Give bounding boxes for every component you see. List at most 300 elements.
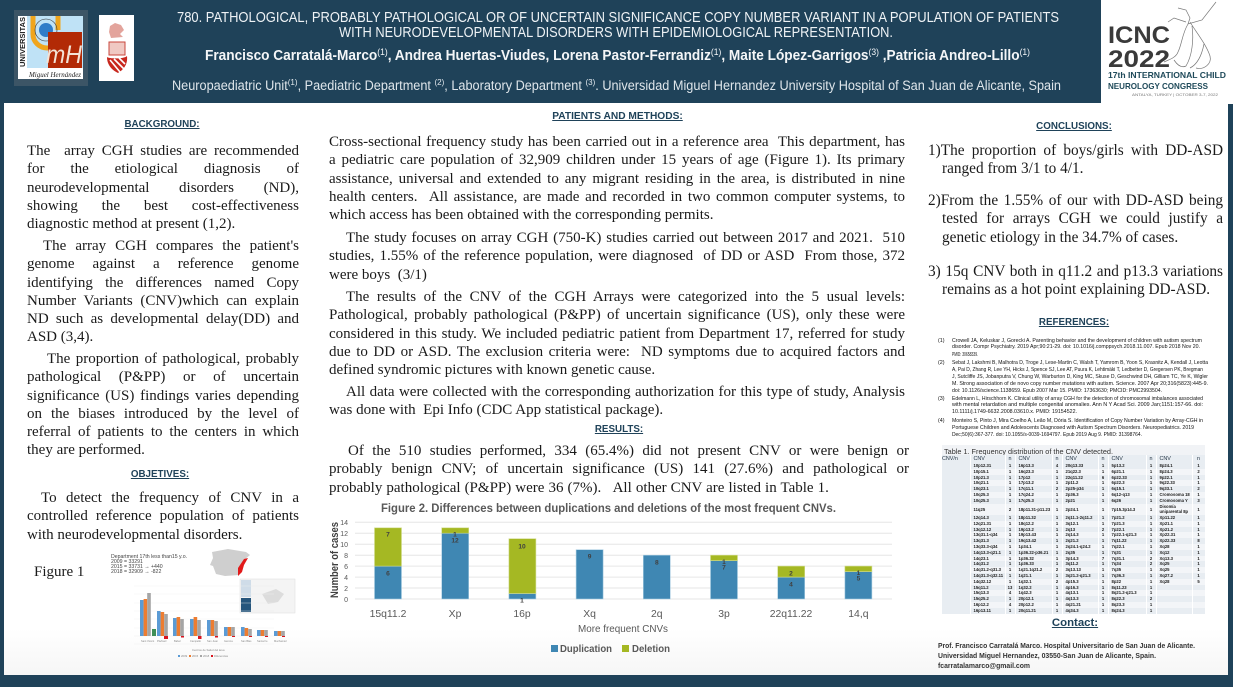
table 1: frequency distribution: 11q25 — [974, 507, 985, 512]
y axis labels: 0 — [344, 597, 348, 604]
affiliations: . Universidad Miguel Hernandez University Hospital of San Juan de Alicante, Spain — [595, 78, 1061, 93]
title line 2: WITH NEURODEVELOPMENTAL DISORDERS WITH EPIDEMIOLOGICAL REPRESENTATION. — [339, 25, 893, 41]
logo: Universitas Miguel Hernandez: UNIVERSITAS — [18, 17, 27, 67]
table 1: frequency distribution: 1 — [1197, 507, 1200, 512]
category labels — [370, 609, 869, 620]
table 1: frequency distribution: 1 — [1056, 498, 1058, 503]
table 1: frequency distribution: 1 — [1102, 602, 1104, 607]
table 1: frequency distribution: 20p12.2 — [1018, 602, 1034, 607]
table 1: frequency distribution: 1 — [1197, 492, 1200, 497]
table 1: frequency distribution: 2 — [1150, 556, 1152, 561]
table 1: frequency distribution: 2 — [1197, 486, 1200, 491]
table 1: frequency distribution: 1p34.1 — [1018, 544, 1032, 549]
table 1: frequency distribution: 1q32.2 — [1018, 585, 1032, 590]
table 1: frequency distribution: 1 — [1009, 480, 1011, 485]
text block: references: (2) — [938, 360, 945, 366]
table 1: frequency distribution: 1 — [1197, 561, 1200, 566]
table 1: frequency distribution: 1 — [1102, 480, 1104, 485]
text block: references: M. Strong association of de novo copy number mutations with autism. Science. 2007 Apr 20;316(5823):445-9. — [952, 381, 1208, 387]
table 1: frequency distribution: 4 — [1009, 602, 1011, 607]
text block: background paragraph 1: diagnostic method at present (1,2). — [27, 216, 235, 232]
table 1: frequency distribution: 1 — [1102, 596, 1104, 601]
text block: background paragraph 3: they are performed. — [27, 442, 145, 458]
table 1: frequency distribution: 10q25.3 — [974, 498, 989, 503]
chart: figure 1 population by health centre with maps: Diferencias — [214, 654, 229, 658]
table 1: frequency distribution: 2 — [1009, 507, 1011, 512]
category labels: 14,q — [848, 609, 869, 620]
category labels: 16p — [513, 609, 531, 620]
table 1: frequency distribution: 1 — [1150, 486, 1152, 491]
text block: references: doi: 10.1126/science.1138659. Epub 2007 Mar 15. PMID: 17363630; PMCID: PMC2993504. — [952, 388, 1162, 394]
logo: ICNC 2022: 17th INTERNATIONAL CHILD — [1108, 70, 1226, 80]
authors: (3) — [869, 47, 879, 57]
table 1: frequency distribution: 2 — [1102, 527, 1104, 532]
table 1: frequency distribution: 1 — [1009, 486, 1011, 491]
table 1: frequency distribution: 6 — [1102, 475, 1104, 480]
table 1: frequency distribution: 21q22.3 — [1066, 469, 1081, 474]
table 1: frequency distribution: 1 — [1102, 507, 1104, 512]
table 1: frequency distribution: 19q13.42 — [1018, 538, 1036, 543]
table 1: frequency distribution: 1 — [1009, 550, 1011, 555]
chart: figure 1 population by health centre with maps: San Juan — [207, 639, 219, 643]
table 1: frequency distribution: 14q31.2 — [974, 561, 989, 566]
authors: Francisco Carratalá-Marco — [205, 48, 387, 64]
table 1: frequency distribution: 10q23.1 — [974, 486, 989, 491]
table 1: frequency distribution: 7p21.2 — [1112, 515, 1125, 520]
table 1: frequency distribution: 1 — [1056, 469, 1058, 474]
legend — [551, 644, 670, 655]
authors: (1) — [1020, 47, 1030, 57]
table 1: frequency distribution: 1 — [1102, 579, 1104, 584]
text block: background paragraph 2: ASD (3,4). — [27, 329, 93, 345]
table 1: frequency distribution: 1 — [1009, 498, 1011, 503]
heading: contact: Contact: — [1052, 617, 1098, 629]
chart: figure 1 population by health centre with maps: 2015 — [192, 654, 199, 658]
text block: background paragraph 1: showing the best cost-effectiveness — [27, 198, 299, 214]
table 1: frequency distribution: 1 — [1150, 579, 1152, 584]
text block: conclusion 2: tested for arrays CGH we could justify a — [942, 210, 1223, 227]
table 1: frequency distribution: 1 — [1056, 527, 1058, 532]
text block: background paragraph 3: pathological (P&PP) or of uncertain — [27, 369, 299, 385]
text block: contact details: fcarratalamarco@gmail.com — [938, 661, 1030, 670]
table 1: frequency distribution: 18q12.2 — [1018, 521, 1034, 526]
table 1: frequency distribution: Cromosoma 18 — [1160, 492, 1190, 497]
category labels: 15q11.2 — [370, 609, 407, 620]
table 1: frequency distribution: 1 — [1056, 585, 1058, 590]
table 1: frequency distribution: 1 — [1150, 532, 1152, 537]
duplication bars — [374, 533, 872, 599]
table 1: frequency distribution: 1q21.1q21.2 — [1018, 567, 1042, 572]
text block: references: with mental retardation and multiple congenital anomalies. Ann N Y Acad Sci. 2009 Jan;1151:157-66. doi: — [951, 402, 1203, 408]
table 1: frequency distribution: 4p16.3 — [1066, 585, 1079, 590]
table 1: frequency distribution: 1 — [1056, 515, 1058, 520]
table 1: frequency distribution: 1 — [1150, 608, 1152, 613]
text block: references: disorder. Compr Psychiatry. 2019 Apr;90:21-29. doi: 10.1016/j.comppsych.2018.11.007. Epub 2018 Nov 20. — [952, 344, 1200, 350]
table 1: frequency distribution: 4q21.21 — [1066, 602, 1081, 607]
table 1: frequency distribution: Xq25 — [1160, 561, 1170, 566]
bar value labels: 9 — [588, 554, 592, 560]
text block: methods paragraph 2 — [329, 230, 905, 282]
table 1: frequency distribution: 7q22.1 — [1112, 544, 1125, 549]
table 1: frequency distribution: 15q13.3 — [974, 590, 989, 595]
table 1: frequency distribution: 1 — [1150, 515, 1152, 520]
table 1: frequency distribution: 1 — [1150, 544, 1152, 549]
text block: methods paragraph 2: The study focuses on array CGH (750-K) studies carried out between 2017 and 2021. 510 — [346, 230, 905, 246]
table 1: frequency distribution: 1 — [1102, 515, 1104, 520]
table 1: frequency distribution: 3q11.2 — [1066, 561, 1078, 566]
table 1: frequency distribution: 17q25.3 — [1018, 498, 1034, 503]
affiliations: , Laboratory Department — [444, 78, 585, 93]
table 1: frequency distribution: 1 — [1009, 573, 1011, 578]
chart: figure 1 population by health centre with maps — [111, 549, 296, 658]
text block: methods paragraph 1: Cross-sectional frequency study has been carried out in a reference area This department, has — [329, 134, 905, 150]
table 1: frequency distribution: n — [1150, 456, 1152, 462]
table 1: frequency distribution: 1 — [1150, 475, 1152, 480]
table 1: frequency distribution: 13 — [1008, 585, 1012, 590]
table 1: frequency distribution — [942, 455, 1205, 614]
text block: background paragraph 2 — [27, 238, 299, 345]
table 1: frequency distribution: 1 — [1102, 590, 1104, 595]
text block: references: J, Sutcliffe JS, Jobanputra V, Chung W, Warburton D, King MC, Skuse D, Geschwind DH, Gilliam TC, Ye K, Wigler — [952, 374, 1208, 380]
table 1: frequency distribution: CNV — [1160, 456, 1171, 462]
text block: methods paragraph 3: considered in this study. We included pediatric patient from Department 17, referred for study — [329, 326, 905, 342]
table 1: frequency distribution: 2 — [1056, 579, 1058, 584]
bar value labels: 7 — [722, 564, 726, 572]
table 1: frequency distribution: 14q32.12 — [974, 579, 991, 584]
logo: ICNC 2022 — [1101, 0, 1233, 104]
text block: background paragraph 3 — [27, 351, 299, 458]
table 1: frequency distribution: 8p22 — [1112, 579, 1121, 584]
table 1: frequency distribution: 1q32.1 — [1018, 579, 1032, 584]
table 1: frequency distribution: 1 — [1056, 590, 1058, 595]
text block: methods paragraph 1: a pediatric care population of 32,909 children under 15 years of age (Figure 1). Its primary — [329, 152, 905, 168]
table 1: frequency distribution: 1 — [1056, 602, 1058, 607]
table 1: frequency distribution: 1 — [1102, 521, 1104, 526]
logo: Universitas Miguel Hernandez: Miguel Hernández — [28, 70, 81, 79]
panel: background and objectives — [4, 103, 320, 675]
table 1: frequency distribution: 4q13.3 — [1066, 596, 1079, 601]
table 1: frequency distribution: 5 — [1197, 579, 1200, 584]
table 1: frequency distribution: 16p13.11 — [974, 608, 991, 613]
table 1: frequency distribution: 1 — [1150, 602, 1152, 607]
chart: figure 1 population by health centre with maps: Santa Fe — [257, 639, 268, 643]
table 1: frequency distribution: 1 — [1197, 532, 1200, 537]
chart: figure 1 population by health centre with maps: Muchamiel — [274, 639, 287, 643]
table 1: frequency distribution: 2q24.1-q24.2 — [1066, 544, 1091, 549]
table 1: frequency distribution: 1 — [1150, 498, 1152, 503]
bar value labels: 5 — [857, 576, 861, 582]
text block: methods paragraph 2: studies, 1.55% of the reference population, were diagnosed of DD or ASD From those, 372 — [329, 248, 905, 264]
logo: ICNC 2022: NEUROLOGY CONGRESS — [1108, 81, 1208, 91]
text block: conclusion 1 — [928, 142, 1223, 177]
table 1: frequency distribution: 20q13.33 — [1066, 463, 1083, 468]
table 1: frequency distribution: Disomía uniparental 8p — [1160, 504, 1188, 514]
table 1: frequency distribution: 1 — [1150, 492, 1152, 497]
table 1: frequency distribution: 1 — [1102, 544, 1104, 549]
authors: , Maite López-Garrigos — [721, 48, 869, 64]
y axis labels: 4 — [344, 575, 348, 582]
table 1: frequency distribution: CNV — [1018, 456, 1030, 462]
text block: methods paragraph 3 — [329, 289, 905, 378]
text block: background paragraph 2: ND such as developmental delay(DD) and — [27, 311, 299, 327]
table 1: frequency distribution: 1 — [1056, 573, 1058, 578]
table 1: frequency distribution: 3q21.2-q21.3 — [1066, 573, 1091, 578]
chart title: Figure 2. Differences between duplications and deletions of the most frequent CNVs. — [381, 501, 836, 515]
legend: Duplication — [560, 644, 612, 655]
text block: results: probably benign CNV; of uncertain significance (US) 141 (27.6%) and pathological or — [329, 461, 909, 477]
chart: figure 1 population by health centre with maps: 2009 = 33291 — [111, 559, 143, 565]
table 1: frequency distribution: 3p14.3 — [1066, 556, 1079, 561]
table 1: frequency distribution: 1 — [1056, 556, 1058, 561]
table 1: frequency distribution: 2 — [1197, 469, 1200, 474]
table 1: frequency distribution: 7p22.1-q21.3 — [1112, 532, 1137, 537]
table 1: frequency distribution: 10p21.3 — [974, 475, 989, 480]
table 1: frequency distribution: 1 — [1056, 507, 1058, 512]
text block: background paragraph 1 — [27, 143, 299, 232]
bar value labels: 1 — [520, 598, 524, 604]
table 1: frequency distribution: 9p22.1 — [1160, 475, 1173, 480]
table 1: frequency distribution: 1 — [1102, 608, 1104, 613]
table 1: frequency distribution: 8 — [1197, 538, 1200, 543]
table 1: frequency distribution: 1 — [1150, 463, 1152, 468]
table 1: frequency distribution: 1 — [1197, 544, 1200, 549]
table 1: frequency distribution: 7q31 — [1112, 550, 1121, 555]
text block: methods paragraph 3: The results of the CNV of the CGH Arrays were categorized into the 5 usual levels: — [346, 289, 905, 305]
table 1: frequency distribution: 4q13.1 — [1066, 590, 1079, 595]
table 1: frequency distribution: 1 — [1056, 608, 1058, 613]
text block: methods paragraph 4: was done with Epi Info (CDC App statistical package). — [329, 402, 663, 418]
table 1: frequency distribution: 2q11.1-2q11.2 — [1066, 515, 1093, 520]
table 1: frequency distribution: 1 — [1150, 573, 1152, 578]
table 1: frequency distribution: CNV — [974, 456, 985, 462]
affiliations: , Paediatric Department — [298, 78, 434, 93]
text block: methods paragraph 2: were boys (3/1) — [329, 266, 427, 282]
table 1: frequency distribution: 8q11.23 — [1112, 585, 1127, 590]
text block: results: Of the 510 studies performed, 334 (65.4%) did not present CNV or were benign or — [348, 443, 909, 459]
bar value labels: 1 — [722, 559, 726, 566]
table 1: frequency distribution: 2p21 — [1066, 498, 1075, 503]
table 1: frequency distribution: 1 — [1009, 538, 1011, 543]
label: figure 1: Figure 1 — [34, 564, 84, 580]
table 1: frequency distribution: 14q13.3-q21.1 — [974, 550, 1001, 555]
table 1: frequency distribution: 16p12.2 — [974, 602, 989, 607]
text block: references: Dec;50(6):367-377. doi: 10.1055/s-0039-1694797. Epub 2019 Aug 9. PMID: 31398764. — [952, 432, 1142, 438]
text block: references — [938, 338, 1208, 438]
table 1: frequency distribution: 7q11.22 — [1112, 538, 1127, 543]
table 1: frequency distribution: 1 — [1056, 480, 1058, 485]
table 1: frequency distribution: 17q24.2 — [1018, 492, 1034, 497]
chart: figure 1 population by health centre with maps: Department 17th less than15 y.o. — [111, 554, 187, 560]
text block: conclusion 2: 2)From the 1.55% of our with DD-ASD being — [928, 192, 1223, 209]
bar value labels: 12 — [451, 538, 459, 544]
text block: background paragraph 3: The proportion of pathological, probably — [47, 351, 299, 367]
title and authors — [172, 10, 1061, 93]
table 1: frequency distribution: 1 — [1197, 573, 1200, 578]
table 1: frequency distribution: 1 — [1102, 498, 1104, 503]
table 1: frequency distribution: 20p12.1 — [1018, 596, 1034, 601]
table 1: frequency distribution: 1q42.3 — [1018, 590, 1032, 595]
table 1: frequency distribution: 19p13.2 — [1018, 527, 1034, 532]
text block: background paragraph 2: identifying the differences named Copy — [27, 274, 299, 290]
category labels: Xq — [583, 609, 596, 620]
table 1: frequency distribution: 9q33.1 — [1160, 486, 1173, 491]
table 1: frequency distribution: 1 — [1009, 527, 1011, 532]
table 1: frequency distribution: 2 — [1150, 596, 1152, 601]
table 1: frequency distribution: 14q31.3-q32.11 — [974, 573, 1003, 578]
table 1: frequency distribution: 1 — [1009, 596, 1011, 601]
table 1: frequency distribution: 1 — [1009, 579, 1011, 584]
table 1: frequency distribution: 16p13.3 — [1018, 463, 1034, 468]
table 1: frequency distribution: 7q31.1 — [1112, 556, 1125, 561]
table 1: frequency distribution: 15q11.2 — [974, 585, 989, 590]
table 1: frequency distribution: n — [1102, 456, 1104, 462]
bar value labels: 6 — [386, 570, 390, 578]
table 1: frequency distribution: Xp11.22 — [1160, 515, 1175, 520]
y axis labels — [340, 520, 348, 604]
table 1: frequency distribution: 9q22.33 — [1160, 480, 1175, 485]
y axis labels: 8 — [344, 553, 348, 560]
table 1: frequency distribution: 10p15.1 — [974, 469, 989, 474]
table 1: frequency distribution: 17p12 — [1018, 475, 1030, 480]
chart: figure 1 population by health centre with maps: San Blas — [241, 639, 252, 643]
bar value labels — [386, 532, 861, 604]
table 1: frequency distribution: CNV/n — [942, 456, 958, 462]
heading: conclusions: CONCLUSIONS: — [1036, 121, 1112, 132]
chart: figure 1 population by health centre with maps: Babel — [174, 639, 181, 643]
table 1: frequency distribution: 13q12.12 — [974, 527, 991, 532]
text block: references: (4) — [938, 418, 945, 424]
chart: figure 1 population by health centre with maps: Centros de Salud del área — [192, 648, 225, 652]
table 1: frequency distribution: 1 — [1009, 463, 1011, 468]
table 1: frequency distribution: 1 — [1056, 492, 1058, 497]
text block: references: PMID: 30658339. — [952, 352, 978, 358]
table 1: frequency distribution: 12q21.31 — [974, 521, 991, 526]
panel: conclusions, references, table, contact — [920, 103, 1228, 675]
table 1: frequency distribution: 1 — [1150, 550, 1152, 555]
table 1: frequency distribution: 1 — [1056, 521, 1058, 526]
y axis labels: 12 — [340, 531, 348, 538]
category labels: 2q — [651, 609, 663, 620]
table 1: frequency distribution: Xq25 — [1160, 567, 1170, 572]
table 1: frequency distribution: 14q31.2-q31.3 — [974, 567, 1001, 572]
logo: Universitas Miguel Hernandez: mH — [46, 41, 83, 69]
category labels: 22q11.22 — [770, 609, 812, 620]
text block: results: probably pathological (P&PP) were 36 (7%). All other CNV are listed in Table 1. — [329, 480, 829, 496]
table 1: frequency distribution: 1 — [1102, 469, 1104, 474]
table 1: frequency distribution: 2q14.3 — [1066, 532, 1079, 537]
category labels: 3p — [718, 609, 730, 620]
heading: results: RESULTS: — [595, 424, 643, 435]
table 1: frequency distribution: 6p21.1 — [1112, 469, 1125, 474]
table 1: frequency distribution: 2q21.2 — [1066, 538, 1079, 543]
table 1: frequency distribution: 1 — [1150, 507, 1152, 512]
table 1: frequency distribution: 1 — [1102, 561, 1104, 566]
text block: conclusion 1: ranged from 3/1 to 4/1. — [942, 160, 1083, 177]
table 1: frequency distribution: 19p13.43 — [1018, 532, 1036, 537]
table 1: frequency distribution: CNV — [1112, 456, 1123, 462]
table 1: frequency distribution: 1p36.33 — [1018, 561, 1034, 566]
logo: ICNC 2022: 2022 — [1108, 46, 1170, 73]
chart: figure 2 duplications and deletions — [329, 501, 892, 655]
table 1: frequency distribution: 1 — [1102, 550, 1104, 555]
table 1: frequency distribution: Xq13.3 — [1160, 556, 1173, 561]
text block: contact details: Universidad Miguel Hernandez, 03550-San Juan de Alicante, Spain. — [938, 651, 1156, 660]
table 1: frequency distribution: 6q12-q13 — [1112, 492, 1130, 497]
table 1: frequency distribution: 18p11.31-p11.23 — [1018, 507, 1050, 512]
text block: objectives: To detect the frequency of CNV in a — [41, 490, 299, 506]
table 1: frequency distribution: 1 — [1197, 475, 1200, 480]
table 1: frequency distribution: 7p22.1 — [1112, 527, 1125, 532]
chart: figure 1 population by health centre with maps: 2009 — [181, 654, 188, 658]
table 1: frequency distribution: Xp22.33 — [1160, 538, 1175, 543]
bar value labels: 1 — [453, 532, 457, 538]
table 1: frequency distribution: Cromosoma Y — [1160, 498, 1188, 503]
chart: figure 1 population by health centre with maps: 2018 = 32909 → -822 — [111, 569, 161, 575]
table 1: frequency distribution: 10q25.3 — [974, 492, 989, 497]
table 1: frequency distribution: 17p13.2 — [1018, 480, 1034, 485]
table 1: frequency distribution: 2p25-p34 — [1066, 486, 1084, 491]
table 1: frequency distribution: Xq28 — [1160, 579, 1170, 584]
table 1: frequency distribution: 1 — [1102, 492, 1104, 497]
table 1: frequency distribution: 1 — [1150, 567, 1152, 572]
text block: references: Crowell JA, Keluskar J, Gorecki A. Parenting behavior and the development of children with autism spectrum — [952, 338, 1202, 344]
table 1: frequency distribution: 18p11.32 — [1018, 515, 1036, 520]
chart: figure 1 population by health centre with maps: 2018 — [203, 654, 210, 658]
text block: references: Sebat J, Lakshmi B, Malhotra D, Troge J, Lese-Martin C, Walsh T, Yamrom B, Yoon S, Krasnitz A, Kendall J, Leotta — [952, 360, 1208, 366]
table 1: frequency distribution: 1 — [1102, 573, 1104, 578]
table 1: frequency distribution: 10p12.31 — [974, 463, 991, 468]
table 1: frequency distribution: 14q23.1 — [974, 556, 989, 561]
text block: methods paragraph 1: health centers. All assistance, are made and recorded in two common computer systems, to — [329, 189, 905, 205]
text block: background paragraph 3: referral of patients to the centers in which — [27, 424, 299, 440]
table 1: frequency distribution: 1 — [1150, 480, 1152, 485]
text block: background paragraph 2: genome against a reference genome — [27, 256, 299, 272]
text block: references: Edelmann L, Hirschhorn K. Clinical utility of array CGH for the detection of chromosomal imbalances associated — [952, 396, 1203, 402]
table 1: frequency distribution: 1 — [1009, 515, 1011, 520]
table 1: frequency distribution: 15q25.2 — [974, 596, 989, 601]
text block: objectives — [27, 490, 299, 542]
text block: conclusion 1: 1)The proportion of boys/girls with DD-ASD — [928, 142, 1223, 159]
table 1: frequency distribution: 13q33.3-q34 — [974, 544, 997, 549]
table 1: frequency distribution: Xq27.2 — [1160, 573, 1173, 578]
table 1: frequency distribution: 8q22.3 — [1112, 596, 1125, 601]
y axis labels: 14 — [340, 520, 348, 527]
authors: (1) — [377, 47, 388, 57]
logo: ICNC 2022: ANTALYA, TURKEY | OCTOBER 3-7, 2022 — [1132, 93, 1218, 97]
table 1: frequency distribution: 1 — [1009, 608, 1011, 613]
authors: (1) — [711, 47, 721, 57]
heading: references: REFERENCES: — [1039, 317, 1109, 328]
text block: methods paragraph 3: Pathological, probably pathological (P&PP) of uncertain significance (US), only these were — [329, 307, 905, 323]
chart: figure 1 population by health centre with maps: Gerona — [224, 639, 233, 643]
table 1: frequency distribution: 1 — [1197, 527, 1200, 532]
table 1: frequency distribution: 10q21.1 — [974, 480, 989, 485]
table 1: frequency distribution: 1 — [1150, 538, 1152, 543]
text block: references: 10.1111/j.1749-6632.2008.03610.x. PMID: 19154522. — [952, 409, 1077, 415]
table 1: frequency distribution: 4q34.3 — [1066, 608, 1079, 613]
text block: conclusion 2: genetic etiology in the 34.7% of cases. — [942, 228, 1178, 246]
text block: conclusion 3: remains as a hot point explaining DD-ASD. — [942, 281, 1210, 298]
text block: contact details — [938, 641, 1195, 670]
table 1: frequency distribution: 1 — [1150, 585, 1152, 590]
table 1: frequency distribution: n — [1056, 456, 1058, 462]
table 1: frequency distribution: 7q35 — [1112, 567, 1121, 572]
text block: methods paragraph 1 — [329, 134, 905, 223]
text block: conclusion 3: 3) 15q CNV both in q11.2 and p13.3 variations — [928, 263, 1223, 280]
table 1: frequency distribution: Xq28 — [1160, 544, 1170, 549]
table 1: frequency distribution: 1q21.1 — [1018, 573, 1032, 578]
table 1: frequency distribution: 1 — [1056, 596, 1058, 601]
